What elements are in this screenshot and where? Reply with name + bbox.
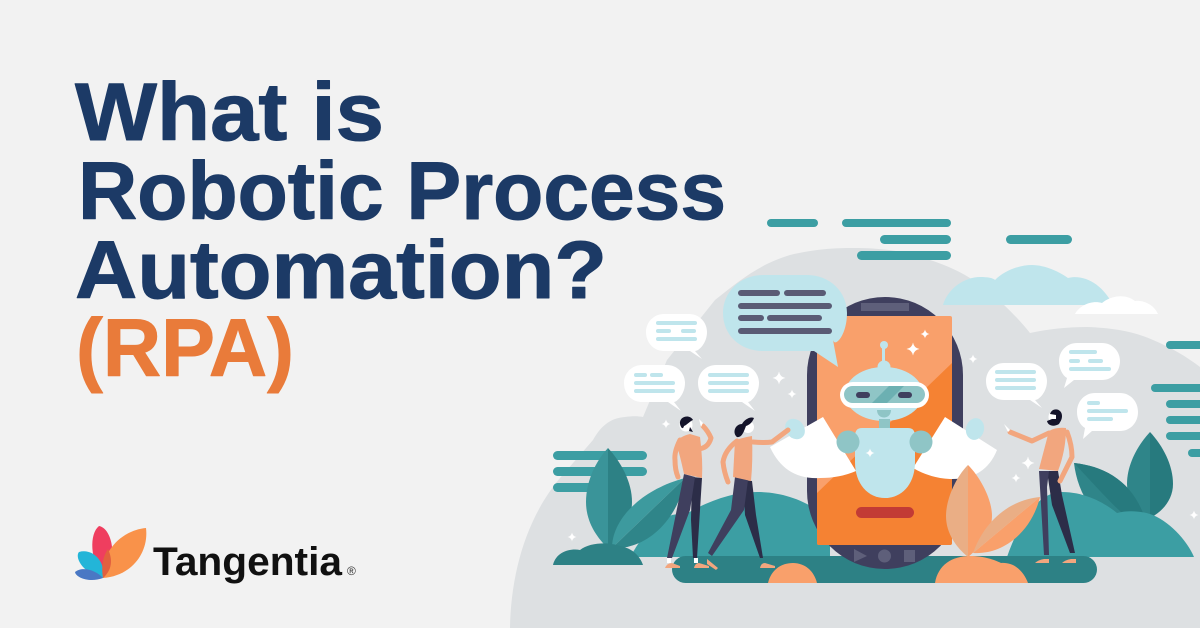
background hills <box>510 248 1200 628</box>
phone <box>807 297 963 569</box>
sparkles <box>568 330 1198 542</box>
logo: Tangentia <box>75 526 356 584</box>
speech bubble A <box>646 314 707 359</box>
orange dome <box>768 563 817 583</box>
ground platform <box>672 556 1097 583</box>
title: Robotic Process <box>78 146 726 237</box>
title: Automation? <box>75 225 607 316</box>
decorative teal bars <box>553 219 1200 492</box>
small dome <box>553 543 643 565</box>
speech bubble F <box>1077 393 1138 439</box>
left leaf <box>612 478 685 548</box>
left plant group <box>586 448 632 548</box>
right plant leaves <box>1074 432 1173 518</box>
title: (RPA) <box>76 303 294 394</box>
teal hills left <box>630 492 830 557</box>
title <box>75 67 726 394</box>
robot-side hands <box>781 415 987 443</box>
logo: Tangentia: ® <box>347 564 356 578</box>
orange plant <box>935 465 1040 583</box>
person: man with raised hand <box>665 417 711 568</box>
clouds <box>943 265 1158 314</box>
person: woman pointing <box>707 417 788 570</box>
phone screen <box>817 316 952 545</box>
large speech bubble <box>723 275 847 367</box>
speech bubble E <box>1059 343 1120 388</box>
speech bubble D <box>986 363 1047 408</box>
robot <box>770 341 997 498</box>
speech bubble B <box>624 365 685 411</box>
speech bubble C <box>698 365 759 411</box>
person: bearded man <box>1004 409 1076 563</box>
title: What is <box>75 67 384 158</box>
teal hills right <box>1007 492 1194 557</box>
logo: Tangentia: Tangentia <box>153 540 343 584</box>
